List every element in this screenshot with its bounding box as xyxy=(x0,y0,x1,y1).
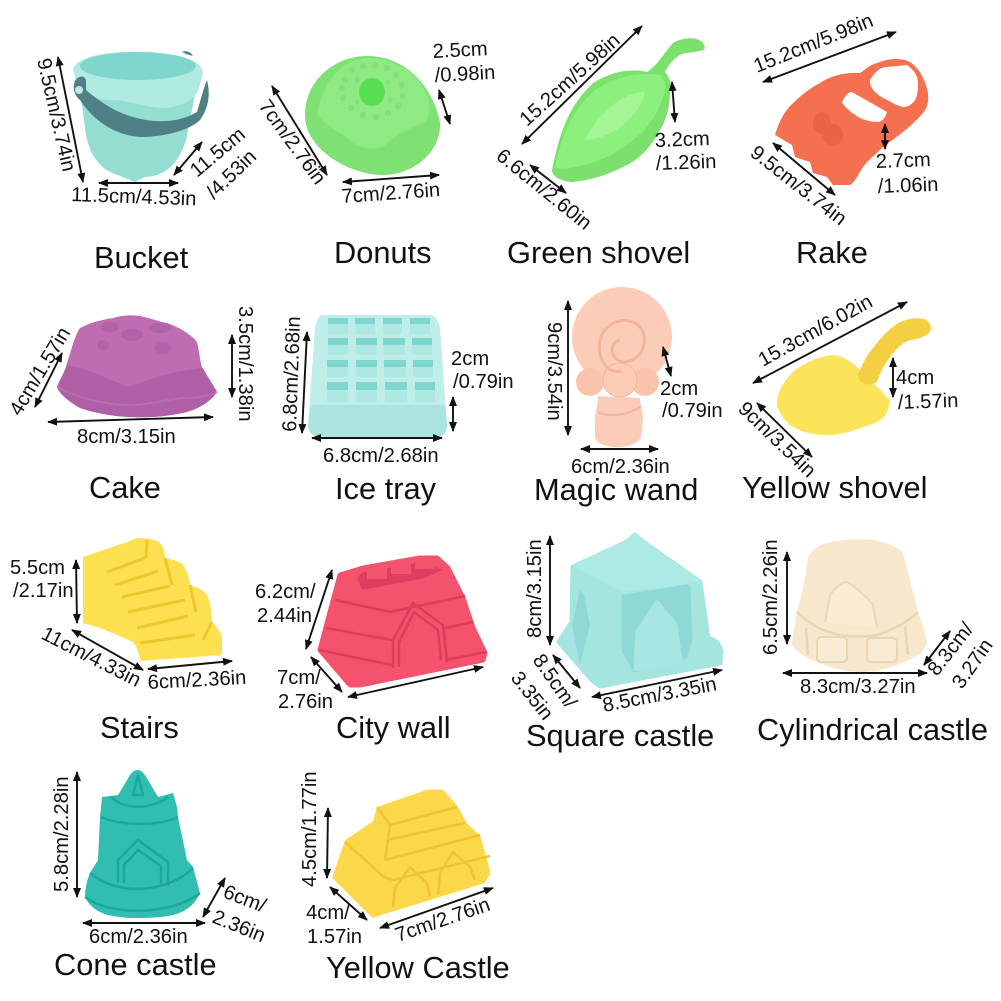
item: cylindrical castle: 8.3cm/3.27in xyxy=(800,676,916,698)
item: cone castle: 5.8cm/2.28in xyxy=(51,776,73,892)
item: bucket: 11.5cm xyxy=(186,123,250,182)
item: yellow shovel xyxy=(734,291,959,505)
item: magic wand: /0.79in xyxy=(662,400,723,422)
item: ice tray: 2cm xyxy=(451,348,489,370)
item: stairs: /2.17in xyxy=(13,580,74,602)
item: stairs: 11cm/4.33in xyxy=(38,623,144,692)
item: ice tray: Ice tray xyxy=(335,471,437,506)
item: donuts xyxy=(254,38,496,270)
item: donuts: 7cm/2.76in xyxy=(341,179,441,208)
item: stairs: 5.5cm xyxy=(10,557,65,579)
item: donuts: /0.98in xyxy=(434,62,496,87)
item: square castle xyxy=(506,533,723,753)
item: magic wand: Magic wand xyxy=(534,472,698,507)
item: green shovel: /1.26in xyxy=(655,151,717,175)
item: green shovel: 3.2cm xyxy=(654,128,710,152)
item: cylindrical castle: 8.3cm/ xyxy=(924,618,978,680)
item: stairs xyxy=(10,538,247,745)
item: magic wand: 2cm xyxy=(660,378,698,400)
item: ice tray: 6.8cm/2.68in xyxy=(323,445,439,467)
item: yellow castle xyxy=(299,771,510,985)
item: cone castle: 2.36in xyxy=(209,906,268,947)
item: green shovel xyxy=(492,26,717,270)
item: rake: 9.5cm/3.74in xyxy=(746,142,851,230)
item: ice tray: 6.8cm/2.68in xyxy=(279,316,305,432)
item: magic wand: 6cm/2.36in xyxy=(571,456,670,478)
item: yellow shovel: 4cm xyxy=(896,367,934,389)
item: cake: 3.5cm/1.38in xyxy=(234,306,256,422)
item: rake: Rake xyxy=(796,235,868,270)
item: cake: 4cm/1.57in xyxy=(5,324,75,420)
item: bucket xyxy=(32,51,261,275)
item: yellow castle: 4.5cm/1.77in xyxy=(299,771,321,887)
item: rake xyxy=(746,10,939,270)
item: city wall xyxy=(255,557,486,745)
item: cylindrical castle: Cylindrical castle xyxy=(757,712,988,747)
item: stairs: 6cm/2.36in xyxy=(147,667,247,694)
item: square castle: 8.5cm/ xyxy=(528,650,581,713)
item: city wall: 2.76in xyxy=(278,691,333,713)
item: yellow shovel: /1.57in xyxy=(897,390,959,414)
item: magic wand: 9cm/3.54in xyxy=(543,322,565,421)
item: donuts: 7cm/2.76in xyxy=(254,96,330,189)
item: yellow castle: Yellow Castle xyxy=(326,950,510,985)
item: cylindrical castle: 6.5cm/2.26in xyxy=(760,539,782,655)
item: yellow castle: 1.57in xyxy=(307,926,362,948)
item: cake: 8cm/3.15in xyxy=(77,426,176,448)
item: rake: 15.2cm/5.98in xyxy=(751,10,876,78)
item: donuts: 2.5cm xyxy=(432,38,488,63)
item: yellow shovel: 9cm/3.54in xyxy=(734,398,820,482)
item: stairs: Stairs xyxy=(100,710,179,745)
item: cylindrical castle: 3.27in xyxy=(948,635,998,693)
item: cone castle: Cone castle xyxy=(54,947,217,982)
item: cone castle: 6cm/ xyxy=(220,881,269,917)
item: rake: /1.06in xyxy=(877,174,939,198)
item: green shovel: 6.6cm/2.60in xyxy=(492,145,596,235)
item: yellow castle: 7cm/2.76in xyxy=(392,894,493,947)
item: cone castle xyxy=(51,770,269,982)
item: city wall: 2.44in xyxy=(257,605,312,627)
item: square castle: 8cm/3.15in xyxy=(524,539,546,638)
item: cake: Cake xyxy=(89,470,161,505)
item: cake xyxy=(5,306,256,505)
item: city wall: City wall xyxy=(336,710,451,745)
item: square castle: 3.35in xyxy=(506,668,557,724)
item: bucket: 11.5cm/4.53in xyxy=(71,184,197,210)
item: bucket: /4.53in xyxy=(202,146,261,204)
item: cone castle: 6cm/2.36in xyxy=(89,926,188,948)
item: yellow shovel: 15.3cm/6.02in xyxy=(755,291,876,371)
item: square castle: Square castle xyxy=(526,718,714,753)
item: green shovel: Green shovel xyxy=(507,235,690,270)
item: bucket: Bucket xyxy=(94,240,189,275)
item: donuts: Donuts xyxy=(334,235,432,270)
item: rake: 2.7cm xyxy=(875,149,931,173)
item: cylindrical castle xyxy=(757,539,998,747)
item: green shovel: 15.2cm/5.98in xyxy=(516,30,625,131)
item: yellow castle: 4cm/ xyxy=(306,902,350,924)
item: ice tray: /0.79in xyxy=(453,371,514,393)
item: yellow shovel: Yellow shovel xyxy=(742,470,927,505)
item: square castle: 8.5cm/3.35in xyxy=(601,673,718,717)
item: magic wand xyxy=(534,287,723,507)
item: city wall: 6.2cm/ xyxy=(255,581,316,603)
item: ice tray xyxy=(279,315,514,506)
item: bucket: 9.5cm/3.74in xyxy=(32,56,80,174)
item: city wall: 7cm/ xyxy=(277,667,321,689)
